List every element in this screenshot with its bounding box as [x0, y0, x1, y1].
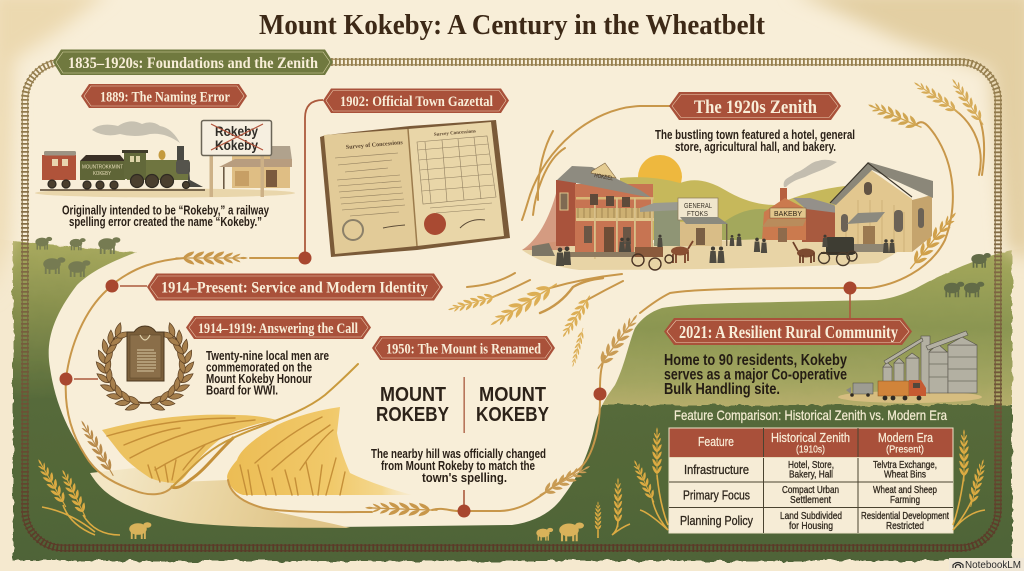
text: honour board description: Twenty-nine local men are — [206, 348, 329, 363]
illustration: town sign with crossed-out name: Kokeby — [215, 137, 258, 153]
illustration: wheat fields — [90, 407, 412, 528]
banner: 2021: 2021: A Resilient Rural Community — [679, 322, 898, 342]
sheep silhouettes — [35, 237, 991, 541]
gold wheat on green field — [34, 427, 988, 538]
watermark: NotebookLM: NotebookLM — [965, 559, 1021, 571]
text: naming error description — [62, 202, 270, 229]
header row: Historical Zenith — [771, 430, 850, 445]
row: primary focus — [683, 484, 937, 506]
row: primary focus: Settlement — [790, 494, 831, 506]
banner: 1889 — [81, 84, 247, 108]
sun — [638, 155, 682, 190]
illustration: steam train — [40, 121, 205, 190]
illustration: station building — [35, 146, 295, 198]
text: 2021 description — [664, 352, 847, 398]
banner: 1920s zenith — [669, 92, 841, 120]
illustration: open survey book — [320, 120, 510, 257]
banner: 1902: 1902: Official Town Gazettal — [340, 94, 493, 110]
row: planning policy: Land Subdivided — [780, 510, 842, 522]
banner: 1914 to present: 1914–Present: Service and Modern Identity — [161, 280, 428, 296]
banner: 1889: 1889: The Naming Error — [100, 90, 230, 106]
row: planning policy — [680, 510, 949, 532]
text: rename description — [371, 446, 546, 485]
agricultural hall — [830, 162, 933, 252]
wheat accents along the timeline — [77, 76, 988, 517]
name comparison: old name: ROKEBY — [376, 404, 450, 426]
name comparison: new name — [476, 384, 550, 426]
illustration: open survey book: Survey of Concessions — [346, 140, 404, 151]
divider — [464, 377, 465, 433]
banner: 1920s zenith: The 1920s Zenith — [694, 98, 818, 118]
illustration: steam train: KOKEBY — [93, 171, 111, 177]
panel: feature comparison — [669, 407, 953, 533]
panel: 1950 the mount is renamed — [371, 336, 555, 485]
text: rename description: from Mount Rokeby to match the — [381, 458, 535, 473]
name comparison: new name: MOUNT — [479, 384, 546, 406]
row: infrastructure: Infrastructure — [684, 462, 749, 477]
panel: 2021 resilient rural community — [664, 318, 982, 403]
banner: 1914-1919: 1914–1919: Answering the Call — [198, 321, 358, 337]
name comparison: old name: MOUNT — [380, 384, 446, 406]
background: green paddocks — [13, 241, 1012, 561]
text: 2021 description: Home to 90 residents, Kokeby — [664, 352, 847, 369]
row: primary focus: Compact Urban — [782, 484, 839, 496]
row: infrastructure: Hotel, Store, — [788, 459, 834, 471]
text: honour board description: Board for WWI. — [206, 382, 278, 398]
row: primary focus: Farming — [890, 494, 920, 506]
text: zenith description: store, agricultural hall, and bakery. — [675, 139, 836, 154]
text: naming error description: spelling error created the name “Kokeby.” — [69, 214, 262, 229]
golden timeline path — [66, 106, 984, 512]
panel: 1914-1919 answering the call — [94, 316, 371, 412]
road — [522, 205, 932, 270]
general store: GENERAL — [684, 201, 712, 210]
title: Mount Kokeby: A Century in the Wheatbelt — [259, 10, 766, 41]
banner: foundations era: 1835–1920s: Foundations and the Zenith — [68, 55, 318, 72]
banner: foundations era — [53, 50, 333, 75]
row: infrastructure: Bakery, Hall — [789, 468, 833, 480]
header row: (1910s) — [796, 444, 825, 456]
row: infrastructure: Telvtra Exchange, — [873, 459, 937, 471]
bakery — [762, 160, 842, 242]
horse and wagon — [632, 235, 693, 270]
row: infrastructure — [684, 459, 937, 480]
row: infrastructure: Wheat Bins — [884, 468, 926, 480]
row: planning policy: for Housing — [789, 520, 833, 532]
panel: 1902 official town gazettal — [320, 88, 510, 257]
banner: 1950: 1950: The Mount is Renamed — [386, 342, 541, 358]
illustration: laurel wreath — [94, 322, 196, 412]
text: naming error description: Originally intended to be “Rokeby,” a railway — [62, 202, 270, 218]
background: aged paper edges — [0, 0, 1024, 300]
text: honour board description: Mount Kokeby Honour — [206, 371, 312, 386]
row: primary focus: Wheat and Sheep — [873, 484, 937, 496]
illustration: steam train: MOUNTROKKMINT — [82, 164, 123, 170]
illustration: honour board plaque — [127, 326, 164, 381]
bakery: BAKEBY — [774, 209, 802, 218]
header row: Modern Era — [878, 430, 934, 445]
banner: 1950 — [372, 336, 555, 360]
illustration: town sign with crossed-out name: Rokeby — [215, 123, 258, 139]
heading: feature comparison: Feature Comparison: Historical Zenith vs. Modern Era — [674, 407, 947, 423]
header row: (Present) — [886, 444, 924, 456]
hotel: HOKEEL — [594, 173, 614, 182]
panel: 1889 naming error — [35, 84, 295, 229]
row: planning policy: Residential Development — [861, 510, 949, 522]
header row — [698, 430, 934, 456]
illustration: open survey book: Survey Concessions — [434, 129, 476, 138]
text: zenith description — [655, 127, 855, 154]
text: honour board description — [206, 348, 329, 398]
header row: Feature — [698, 434, 734, 449]
hills — [620, 177, 880, 240]
text: 2021 description: serves as a major Co-operative — [664, 366, 847, 384]
row: planning policy: Planning Policy — [680, 513, 753, 528]
comparison table — [669, 428, 953, 533]
illustration: grain silos and trucks — [838, 331, 982, 403]
text: rename description: town's spelling. — [422, 470, 507, 485]
text: zenith description: The bustling town featured a hotel, general — [655, 127, 855, 142]
general store: FTOKS — [687, 209, 708, 218]
panel: 1920s zenith — [522, 92, 933, 270]
text: rename description: The nearby hill was officially changed — [371, 446, 546, 461]
banner: 1914 to present — [147, 274, 443, 300]
illustration: town scene — [522, 155, 933, 270]
name comparison: new name: KOKEBY — [476, 404, 550, 426]
text: honour board description: commemorated on the — [206, 360, 312, 374]
banner: 2021 — [664, 318, 912, 345]
townspeople — [556, 234, 895, 266]
row: primary focus: Primary Focus — [683, 488, 750, 502]
banner: 1902 — [323, 88, 509, 113]
general store — [640, 198, 728, 246]
name comparison: old name — [376, 384, 450, 426]
illustration: town sign with crossed-out name — [202, 120, 272, 197]
banner: 1914-1919 — [186, 316, 371, 339]
horse and carriage — [793, 235, 857, 266]
row: planning policy: Restricted — [886, 520, 924, 532]
timeline nodes and connectors — [60, 100, 856, 518]
text: 2021 description: Bulk Handling site. — [664, 381, 780, 398]
hotel — [522, 163, 656, 259]
